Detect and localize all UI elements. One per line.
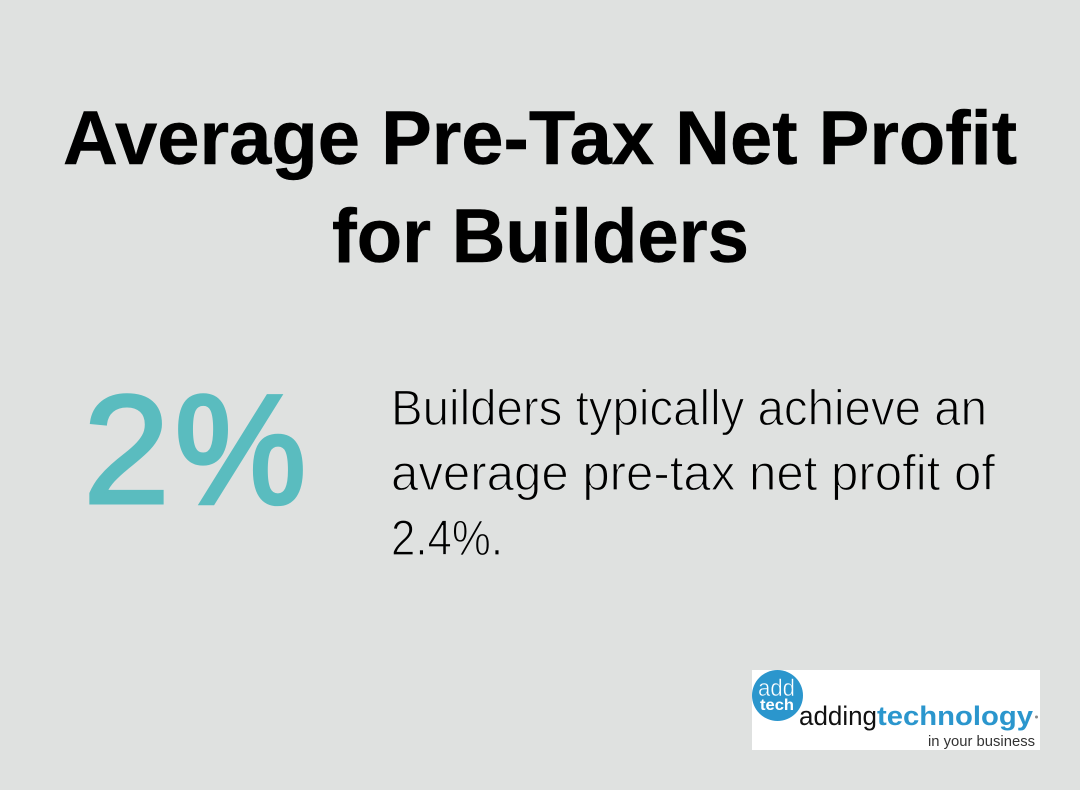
icon: add tech circle	[752, 670, 803, 721]
description text: average pre-tax net profit of	[391, 445, 995, 501]
icon: add tech circle: add	[758, 675, 795, 702]
logo wordmark: technology	[877, 701, 1033, 731]
description text: 2.4%.	[391, 510, 503, 566]
logo: adding technology	[752, 670, 1040, 750]
title	[63, 96, 1017, 279]
title: Average Pre-Tax Net Profit	[63, 96, 1017, 181]
big statistic: 2%: 2	[83, 363, 170, 536]
title: for Builders	[332, 194, 749, 279]
logo wordmark	[799, 701, 1038, 750]
logo wordmark: adding	[799, 701, 877, 731]
description text: Builders typically achieve an	[391, 380, 987, 436]
big statistic: 2%	[83, 363, 306, 536]
icon: add tech circle: tech	[760, 697, 794, 714]
big statistic: 2%: %	[175, 363, 306, 536]
logo wordmark: in your business	[928, 734, 1035, 750]
description text	[391, 380, 995, 566]
